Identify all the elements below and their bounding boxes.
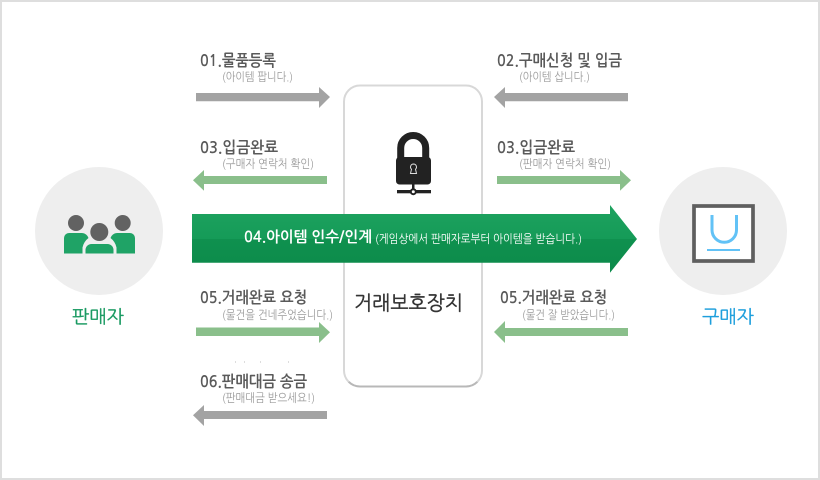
step 03 seller: 03.입금완료 <box>200 139 278 156</box>
icon: network padlock <box>396 136 431 194</box>
step 05 seller <box>196 289 333 343</box>
step 04 big arrow: (게임상에서 판매자로부터 아이템을 받습니다.) <box>375 232 582 245</box>
step 03 seller: (구매자 연락처 확인) <box>222 157 314 170</box>
step 03 buyer: (판매자 연락처 확인) <box>519 157 611 170</box>
buyer label: 구매자 <box>702 308 754 326</box>
step 03 buyer <box>497 139 631 191</box>
step 02: (아이템 삽니다.) <box>519 71 590 83</box>
buyer <box>659 167 787 326</box>
step 04 big arrow <box>192 205 637 273</box>
step 02 <box>494 52 628 108</box>
step 01: (아이템 팝니다.) <box>222 71 293 83</box>
arrow: left green <box>193 170 327 191</box>
buyer circle <box>659 167 787 295</box>
arrow: left gray <box>193 405 327 426</box>
step 05 buyer: 05.거래완료 요청 <box>500 289 607 306</box>
seller label: 판매자 <box>72 308 124 326</box>
step 03 buyer: 03.입금완료 <box>497 139 575 156</box>
arrow: left gray <box>494 87 628 108</box>
seller <box>35 167 163 326</box>
arrow: right green <box>196 322 330 343</box>
step 03 seller <box>193 139 327 191</box>
step 05 buyer <box>494 289 628 343</box>
step 06 <box>193 373 327 426</box>
step 04 big arrow: 04.아이템 인수/인계 <box>244 229 372 245</box>
icon: seller group <box>64 215 135 254</box>
step 05 seller: (물건을 건네주었습니다.) <box>222 309 333 321</box>
device label: 거래보호장치 <box>354 293 463 313</box>
arrow: right green <box>497 170 631 191</box>
arrow: right gray <box>196 87 330 108</box>
step 05 buyer: (물건 잘 받았습니다.) <box>522 308 615 321</box>
step 02: 02.구매신청 및 입금 <box>497 52 622 69</box>
icon: buyer U mark <box>694 206 753 261</box>
step 06: 06.판매대금 송금 <box>200 373 307 390</box>
panel: escrow device <box>344 86 482 386</box>
step 01: 01.물품등록 <box>200 52 276 69</box>
arrow: left green <box>494 321 628 343</box>
step 05 seller: 05.거래완료 요청 <box>200 289 307 306</box>
seller circle <box>35 167 163 295</box>
step 01 <box>196 52 330 108</box>
step 06: (판매대금 받으세요!) <box>222 392 315 404</box>
